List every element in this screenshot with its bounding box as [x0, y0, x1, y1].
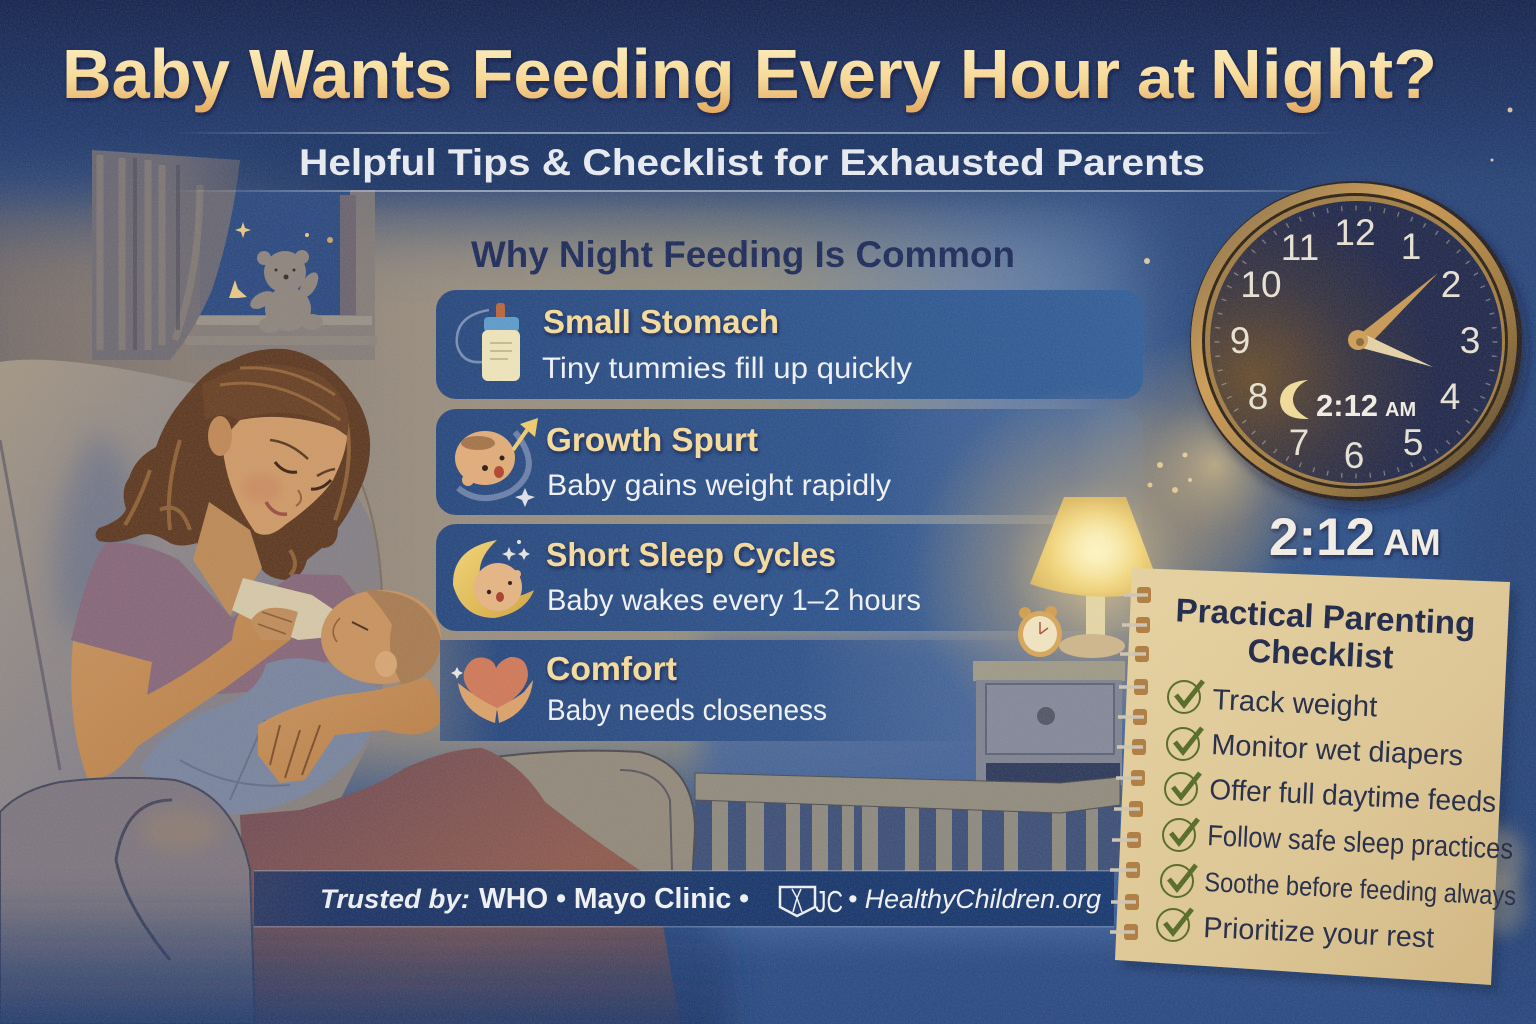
panel: comfort — [440, 640, 1040, 741]
clock numerals: 1 — [1401, 226, 1421, 267]
panel: small stomach: Tiny tummies fill up quickly — [542, 352, 912, 385]
title: Baby Wants Feeding Every Hour — [62, 35, 1120, 113]
lamp glow — [910, 385, 1280, 755]
icon: small alarm clock — [1018, 606, 1062, 657]
heading: why night feeding is common: Why Night Feeding Is Common — [471, 234, 1015, 275]
armchair front arm — [0, 778, 255, 1024]
icon: heart in hands — [451, 657, 533, 723]
time caption: 2:12AM — [1269, 508, 1441, 567]
clock numerals: 4 — [1440, 376, 1460, 417]
arm cradling baby — [258, 677, 441, 783]
panel: growth spurt — [436, 409, 1143, 515]
icon: teddy bear — [247, 250, 323, 333]
crib rail and bars — [695, 773, 1120, 872]
panel: growth spurt: Growth Spurt — [546, 421, 758, 458]
subtitle band — [170, 132, 1340, 192]
clock numerals: 11 — [1281, 227, 1319, 268]
icon: baby bottle — [457, 303, 520, 381]
panel: short sleep cycles — [436, 524, 1143, 631]
clock numerals: 10 — [1240, 264, 1282, 305]
hair back — [96, 349, 370, 580]
panel: small stomach — [436, 290, 1143, 399]
panel: comfort: Comfort — [546, 650, 677, 687]
digital time on clock face: 2:12 AM — [1316, 388, 1416, 423]
nightstand with lamp and alarm clock — [973, 497, 1161, 787]
neck and chest — [193, 502, 262, 616]
armchair — [0, 360, 695, 885]
icon: shield logo — [780, 884, 843, 919]
icon: baby bottle — [232, 578, 337, 640]
blanket over mother's lap — [240, 748, 680, 1024]
clock numerals: 6 — [1344, 435, 1364, 476]
checklist heading: Checklist — [1247, 632, 1394, 675]
clock numerals: 9 — [1230, 320, 1250, 361]
clock numerals: 3 — [1460, 320, 1480, 361]
trusted by band: WHO • Mayo Clinic • — [479, 883, 749, 915]
mother nursing baby — [71, 349, 441, 815]
icon: baby on crescent moon — [453, 540, 534, 618]
checklist heading — [1175, 591, 1476, 675]
checklist heading: Practical Parenting — [1175, 591, 1476, 642]
clock numerals — [1230, 212, 1480, 476]
checklist items: Monitor wet diapers — [1211, 729, 1464, 772]
left arm and hand — [71, 588, 301, 778]
shirt — [71, 543, 370, 700]
panel: growth spurt: Baby gains weight rapidly — [547, 469, 891, 502]
trusted by band — [254, 870, 1114, 928]
icon: shield logo: JC — [815, 884, 843, 919]
checklist items: Prioritize your rest — [1203, 912, 1435, 954]
trusted by band: Trusted by: — [320, 884, 470, 914]
face — [222, 417, 347, 535]
clock numerals: 7 — [1289, 422, 1309, 463]
panel: short sleep cycles: Baby wakes every 1–2 hours — [547, 584, 921, 617]
clock hands — [1348, 273, 1438, 367]
curtain and window with teddy bear — [92, 150, 377, 360]
baby — [140, 590, 441, 815]
checklist items: Offer full daytime feeds — [1209, 774, 1497, 819]
panel: practical parenting checklist notebook — [1110, 568, 1526, 993]
panel: comfort: Baby needs closeness — [547, 694, 827, 727]
title: at — [1137, 46, 1195, 111]
panel: short sleep cycles: Short Sleep Cycles — [546, 536, 836, 573]
clock glow specks — [1144, 58, 1512, 493]
trusted by band: • HealthyChildren.org — [848, 884, 1101, 914]
icon: crescent moon — [1280, 380, 1309, 419]
clock numerals: 12 — [1334, 212, 1376, 253]
green check marks — [1157, 681, 1203, 941]
checklist items — [1203, 684, 1517, 954]
panel: small stomach: Small Stomach — [543, 303, 779, 340]
clock numerals: 8 — [1248, 376, 1268, 417]
spiral rings — [1110, 587, 1151, 940]
clock numerals: 2 — [1441, 264, 1461, 305]
icon: baby with growth arrow — [455, 418, 538, 507]
subtitle band: Helpful Tips & Checklist for Exhausted Parents — [299, 142, 1205, 183]
icon: lamp — [1030, 497, 1161, 658]
clock numerals: 5 — [1403, 422, 1423, 463]
title: Night? — [1210, 35, 1437, 113]
bottom dark fade — [0, 885, 730, 1024]
wall clock — [1190, 181, 1522, 501]
checklist items: Track weight — [1212, 684, 1378, 723]
